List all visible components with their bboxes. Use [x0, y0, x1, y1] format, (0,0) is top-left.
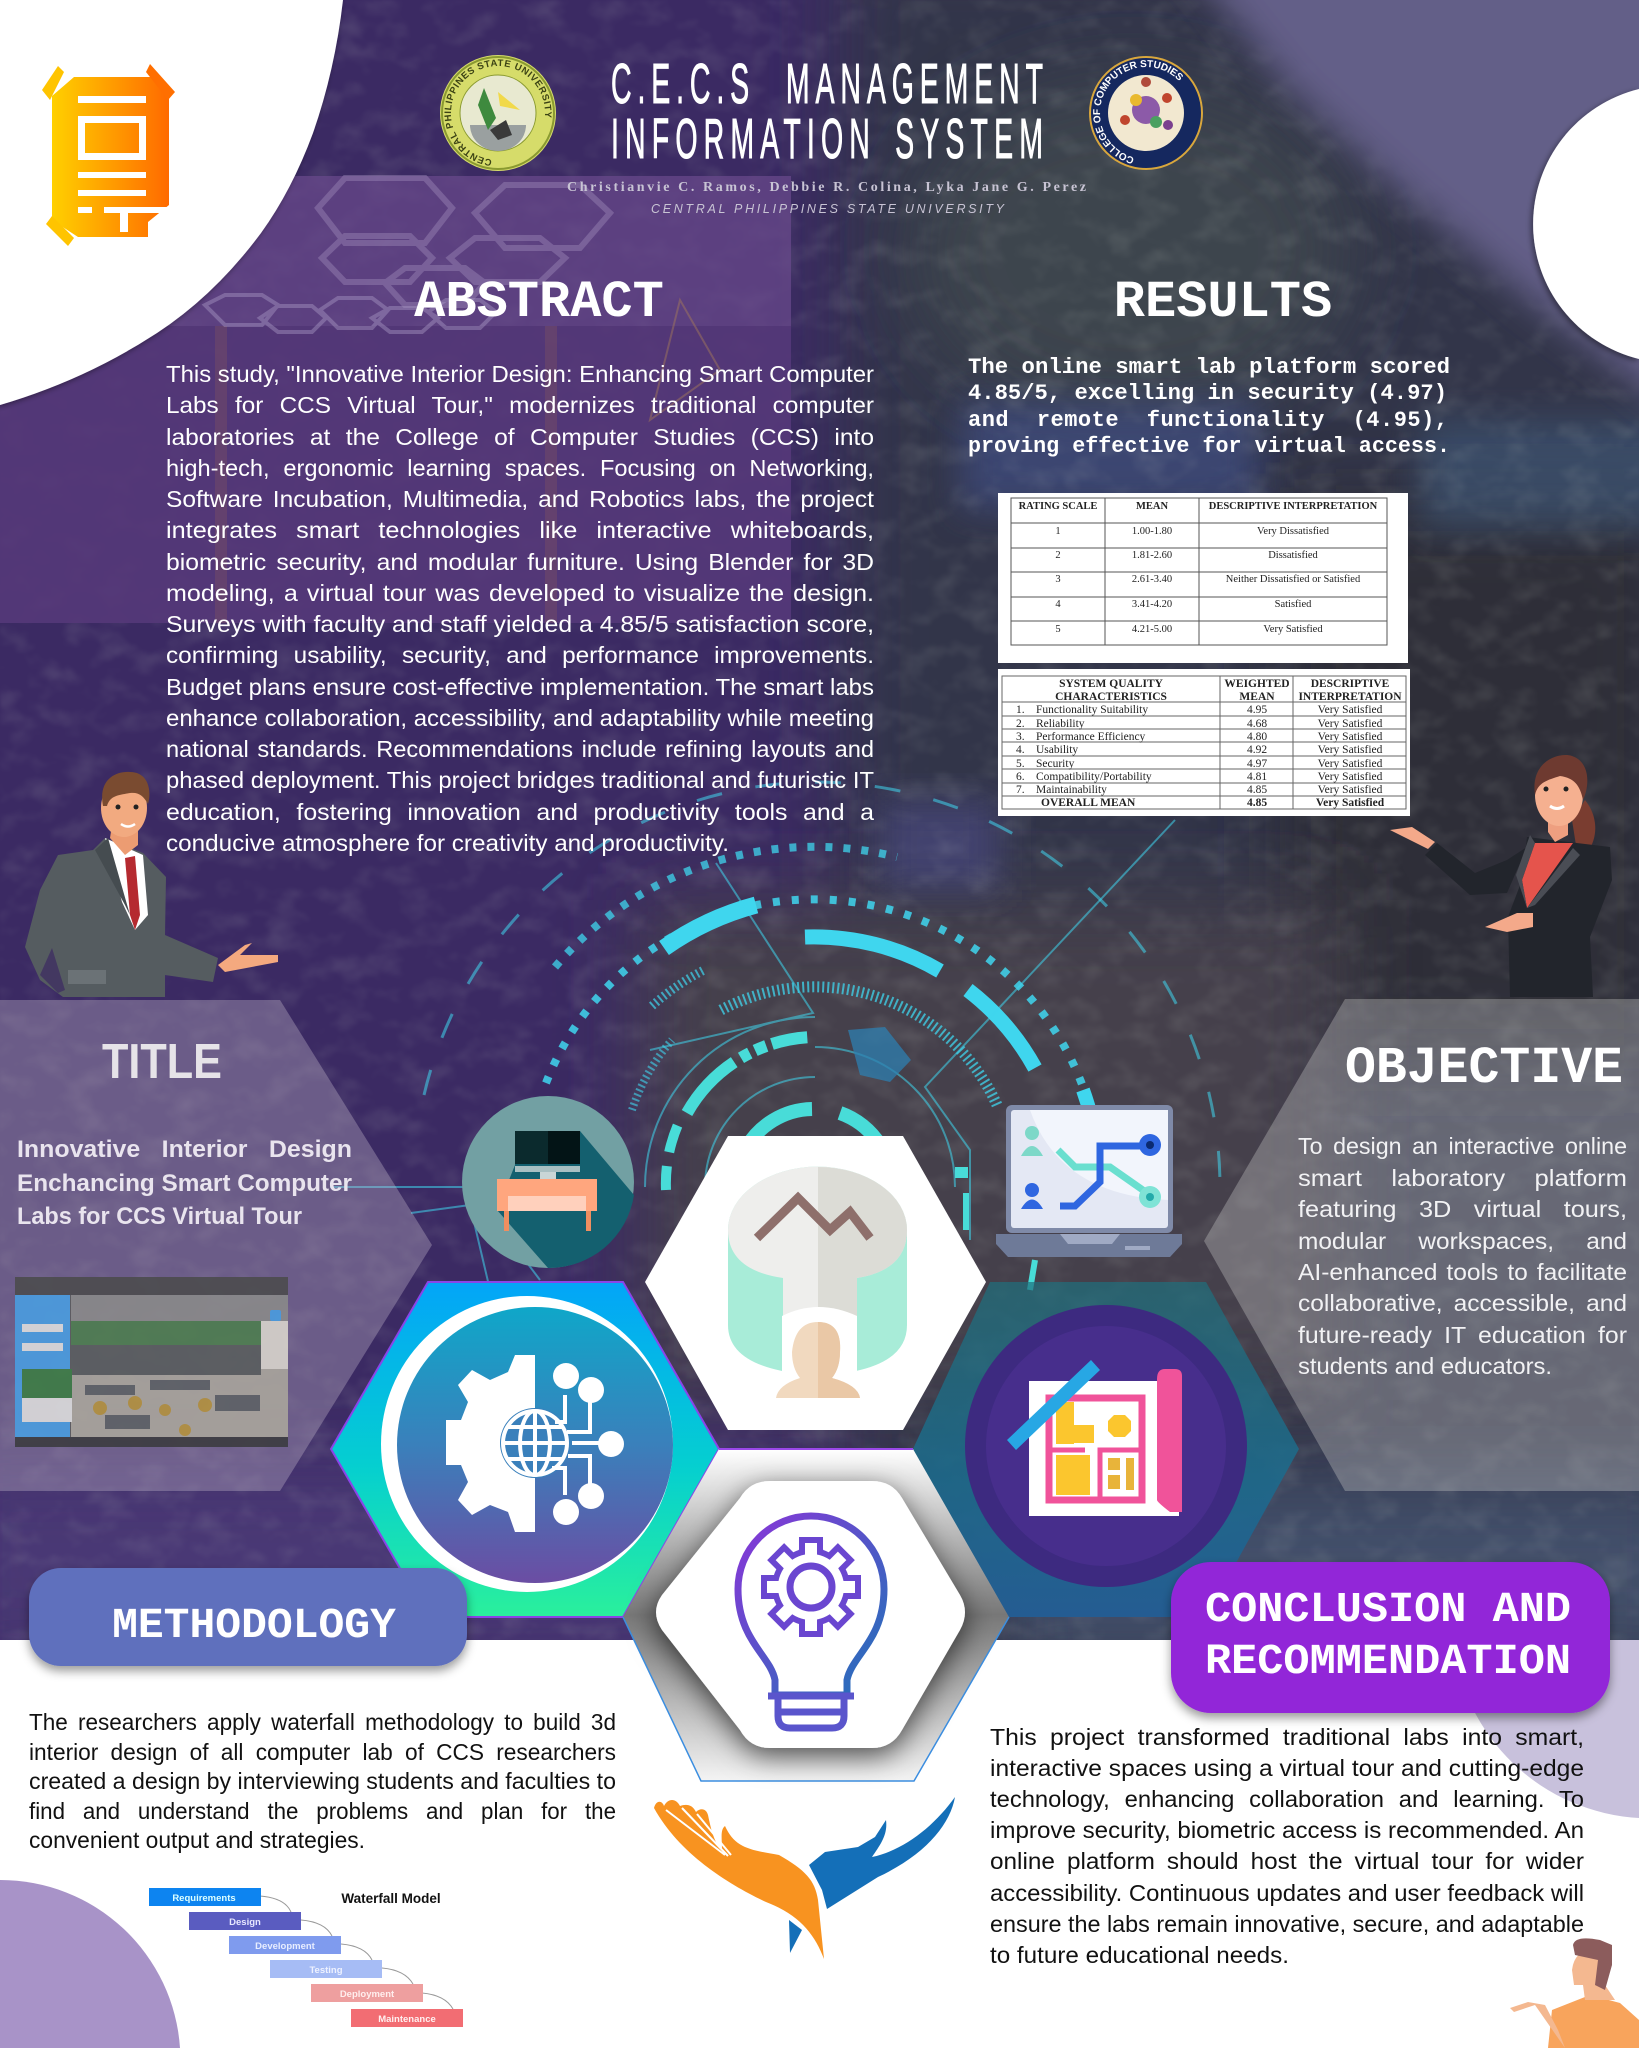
table: system quality: Performance Efficiency [1036, 731, 1146, 743]
table: rating scale: RATING SCALE [1019, 501, 1097, 512]
waterfall model diagram: Requirements [172, 1893, 236, 1904]
table: rating scale: 1.81-2.60 [1132, 550, 1172, 561]
objective text: featuring 3D virtual tours, [1298, 1196, 1627, 1222]
objective text: To design an interactive online [1298, 1133, 1627, 1159]
table: system quality: Very Satisfied [1318, 718, 1383, 730]
table: rating scale: MEAN [1136, 501, 1168, 512]
icon: bulb with gear [738, 1516, 884, 1728]
abstract text: integrates smart technologies like interactive whiteboards, [166, 517, 874, 543]
abstract text: This study, "Innovative Interior Design: Enhancing Smart Computer [166, 361, 874, 387]
objective text: AI-enhanced tools to facilitate [1298, 1259, 1627, 1285]
waterfall model diagram: Design [229, 1917, 261, 1928]
conclusion text: technology, enhancing collaboration and learning. To [990, 1786, 1584, 1812]
table: rating scale: 1 [1055, 526, 1061, 537]
conclusion text: to future educational needs. [990, 1942, 1289, 1968]
presenter: man [25, 772, 278, 997]
conclusion text: This project transformed traditional labs into smart, [990, 1724, 1584, 1750]
boy character [1510, 1938, 1639, 2048]
title [611, 51, 1043, 171]
conclusion text [990, 1724, 1584, 1968]
conclusion text: accessibility. Continuous updates and user feedback will [990, 1880, 1584, 1906]
abstract text: modeling, a virtual tour was developed to visualize the design. [166, 580, 874, 606]
title: C.E.C.S MANAGEMENT [611, 51, 1043, 116]
methodology text: created a design by interviewing students and faculties to [29, 1768, 616, 1794]
table: system quality: 4.92 [1247, 744, 1267, 756]
table: system quality: INTERPRETATION [1298, 691, 1402, 703]
waterfall model diagram: Development [255, 1941, 316, 1952]
abstract text: enhance collaboration, accessibility, and adaptability while meeting [166, 705, 874, 731]
tech circle graphic [330, 782, 1220, 1290]
pill: conclusion and recommendation [1171, 1562, 1610, 1713]
objective text: collaborative, accessible, and [1298, 1290, 1627, 1316]
table: system quality: 4.81 [1247, 771, 1267, 783]
table: rating scale: 4.21-5.00 [1132, 624, 1172, 635]
table: rating scale: DESCRIPTIVE INTERPRETATION [1209, 501, 1378, 512]
table: system quality: Very Satisfied [1318, 758, 1383, 770]
authors: Christianvie C. Ramos, Debbie R. Colina, Lyka Jane G. Perez [567, 180, 1086, 195]
table: rating scale: 2.61-3.40 [1132, 574, 1172, 585]
university: CENTRAL PHILIPPINES STATE UNIVERSITY [651, 202, 1006, 216]
icon: idea person [728, 1167, 907, 1402]
interior render overlay [0, 176, 791, 623]
shape: pale circle right [1453, 1640, 1639, 1818]
screenshot: 3D lab [15, 1277, 288, 1447]
table: system quality: 3. [1016, 731, 1025, 743]
conclusion text: ensure the labs remain innovative, secure, and adaptable [990, 1911, 1584, 1937]
abstract text [166, 361, 875, 856]
hexagon: gear globe [331, 1282, 719, 1617]
objective text: students and educators. [1298, 1353, 1552, 1379]
table: rating scale: Dissatisfied [1268, 550, 1319, 561]
icon: desk circle [462, 1096, 634, 1268]
heading: title: TITLE [102, 1035, 222, 1089]
pill: methodology: METHODOLOGY [112, 1601, 396, 1650]
results text: The online smart lab platform scored [968, 355, 1450, 380]
waterfall model diagram [149, 1888, 463, 2027]
abstract text: biometric security, and modular furniture. Using Blender for 3D [166, 549, 874, 575]
abstract text: Labs for CCS Virtual Tour," modernizes traditional computer [166, 392, 874, 418]
logo: Central Philippines State University: CENTRAL PHILIPPINES STATE UNIVERSITY [444, 59, 552, 166]
table: system quality: 4.80 [1247, 731, 1267, 743]
icon: blueprint [1007, 1360, 1182, 1516]
abstract text: laboratories at the College of Computer Studies (CCS) into [166, 424, 874, 450]
presenter: woman [1390, 755, 1612, 997]
table: system quality: 4.95 [1247, 704, 1267, 716]
panel: objective [1204, 999, 1639, 1491]
abstract text: confirming usability, security, and performance improvements. [166, 642, 874, 668]
table: rating scale: 3 [1055, 574, 1061, 585]
table: system quality: 4.68 [1247, 718, 1267, 730]
table: rating scale: Neither Dissatisfied or Satisfied [1226, 574, 1361, 585]
conclusion text: improve security, biometric access is recommended. An [990, 1817, 1584, 1843]
white circle top-right [1533, 89, 1639, 359]
objective text [1298, 1133, 1627, 1379]
objective text: future-ready IT education for [1298, 1322, 1627, 1348]
heading: results: RESULTS [1114, 273, 1332, 332]
table: system quality: MEAN [1239, 691, 1275, 703]
title text [17, 1136, 352, 1230]
table: rating scale: Very Dissatisfied [1257, 526, 1330, 537]
title text: Labs for CCS Virtual Tour [17, 1203, 302, 1230]
bottom white area [0, 1640, 1639, 2048]
table: system quality: Security [1036, 758, 1075, 770]
pill: conclusion and recommendation: RECOMMENDATION [1205, 1637, 1571, 1686]
table: system quality: 4.97 [1247, 758, 1267, 770]
abstract text: Surveys with faculty and staff yielded a 4.85/5 satisfaction score, [166, 611, 874, 637]
table: rating scale: 5 [1055, 624, 1061, 635]
conclusion text: online platform should host the virtual tour for wider [990, 1848, 1584, 1874]
table: system quality: 4.85 [1247, 797, 1267, 809]
table: system quality: DESCRIPTIVE [1311, 678, 1390, 690]
icon: laptop [996, 1105, 1182, 1257]
waterfall model diagram: Deployment [340, 1989, 395, 2000]
title text: Enchancing Smart Computer [17, 1170, 352, 1197]
table: rating scale: Very Satisfied [1263, 624, 1323, 635]
methodology text: interior design of all computer lab of CCS researchers [29, 1739, 616, 1765]
table: system quality: Very Satisfied [1318, 771, 1383, 783]
heading: abstract: ABSTRACT [414, 273, 664, 332]
table: system quality: WEIGHTED [1224, 678, 1290, 690]
methodology text: convenient output and strategies. [29, 1827, 365, 1853]
table: rating scale: 3.41-4.20 [1132, 599, 1172, 610]
abstract text: high-tech, ergonomic learning spaces. Focusing on Networking, [166, 455, 874, 481]
table: system quality: 4. [1016, 744, 1025, 756]
shape: lilac circle bottom-left [0, 1880, 180, 2048]
results text: 4.85/5, excelling in security (4.97) [968, 381, 1447, 406]
table: system quality: Very Satisfied [1318, 704, 1383, 716]
logo: College of Computer Studies: COLLEGE OF COMPUTER STUDIES [1093, 60, 1183, 164]
table: system quality: Reliability [1036, 718, 1085, 730]
table: system quality: Very Satisfied [1318, 784, 1383, 796]
abstract text: conducive atmosphere for creativity and productivity. [166, 830, 729, 856]
pill: methodology [29, 1568, 467, 1666]
hands icon [654, 1797, 955, 1959]
pill: conclusion and recommendation: CONCLUSION AND [1205, 1585, 1571, 1634]
methodology text: The researchers apply waterfall methodology to build 3d [29, 1709, 616, 1735]
results text: and remote functionality (4.95), [968, 408, 1448, 433]
icon: gear with circuit [446, 1355, 624, 1532]
table: system quality: 5. [1016, 758, 1025, 770]
hexagon: right blueprint [913, 1282, 1299, 1617]
waterfall model diagram: Maintenance [378, 2014, 436, 2025]
methodology text [29, 1709, 616, 1853]
table: system quality [998, 669, 1410, 816]
table: system quality: Very Satisfied [1318, 744, 1383, 756]
table: system quality: 2. [1016, 718, 1025, 730]
white corner blob top-left [0, 0, 343, 405]
table: rating scale: 4 [1055, 599, 1061, 610]
table: rating scale [998, 493, 1408, 663]
waterfall model diagram: Testing [309, 1965, 343, 1976]
abstract text: phased deployment. This project bridges traditional and futuristic IT [166, 767, 874, 793]
table: system quality: Very Satisfied [1316, 797, 1385, 809]
table: system quality: Very Satisfied [1318, 731, 1383, 743]
table: system quality: 1. [1016, 704, 1025, 716]
abstract text: education, fostering innovation and productivity tools and a [166, 799, 874, 825]
results text [968, 355, 1450, 459]
table: system quality: SYSTEM QUALITY [1059, 678, 1164, 690]
title: INFORMATION SYSTEM [611, 106, 1043, 171]
abstract text: Software Incubation, Multimedia, and Robotics labs, the project [166, 486, 875, 512]
results text: proving effective for virtual access. [968, 434, 1450, 459]
abstract text: national standards. Recommendations include refining layouts and [166, 736, 874, 762]
title text: Innovative Interior Design [17, 1136, 352, 1163]
hexagon: mountain and person [645, 1136, 986, 1430]
table: system quality: 6. [1016, 771, 1025, 783]
table: system quality: 4.85 [1247, 784, 1267, 796]
hexagon: lightbulb [623, 1449, 1009, 1781]
table: system quality: 7. [1016, 784, 1025, 796]
table: system quality: OVERALL MEAN [1041, 797, 1136, 809]
waterfall model diagram: Waterfall Model [341, 1891, 441, 1906]
abstract text: Budget plans ensure cost-effective implementation. The smart labs [166, 674, 874, 700]
objective text: modular workspaces, and [1298, 1228, 1627, 1254]
table: system quality: Functionality Suitability [1036, 704, 1148, 716]
table: rating scale: 2 [1055, 550, 1061, 561]
table: system quality: Compatibility/Portability [1036, 771, 1152, 783]
table: system quality: Maintainability [1036, 784, 1107, 796]
table: rating scale: Satisfied [1275, 599, 1312, 610]
panel: title [0, 1000, 432, 1491]
objective text: smart laboratory platform [1298, 1165, 1627, 1191]
icon: orange document [42, 64, 175, 246]
methodology text: find and understand the problems and plan for the [29, 1798, 616, 1824]
conclusion text: interactive spaces using a virtual tour and cutting-edge [990, 1755, 1584, 1781]
heading: objective: OBJECTIVE [1345, 1039, 1623, 1098]
table: system quality: CHARACTERISTICS [1055, 691, 1167, 703]
table: system quality: Usability [1036, 744, 1078, 756]
table: rating scale: 1.00-1.80 [1132, 526, 1172, 537]
